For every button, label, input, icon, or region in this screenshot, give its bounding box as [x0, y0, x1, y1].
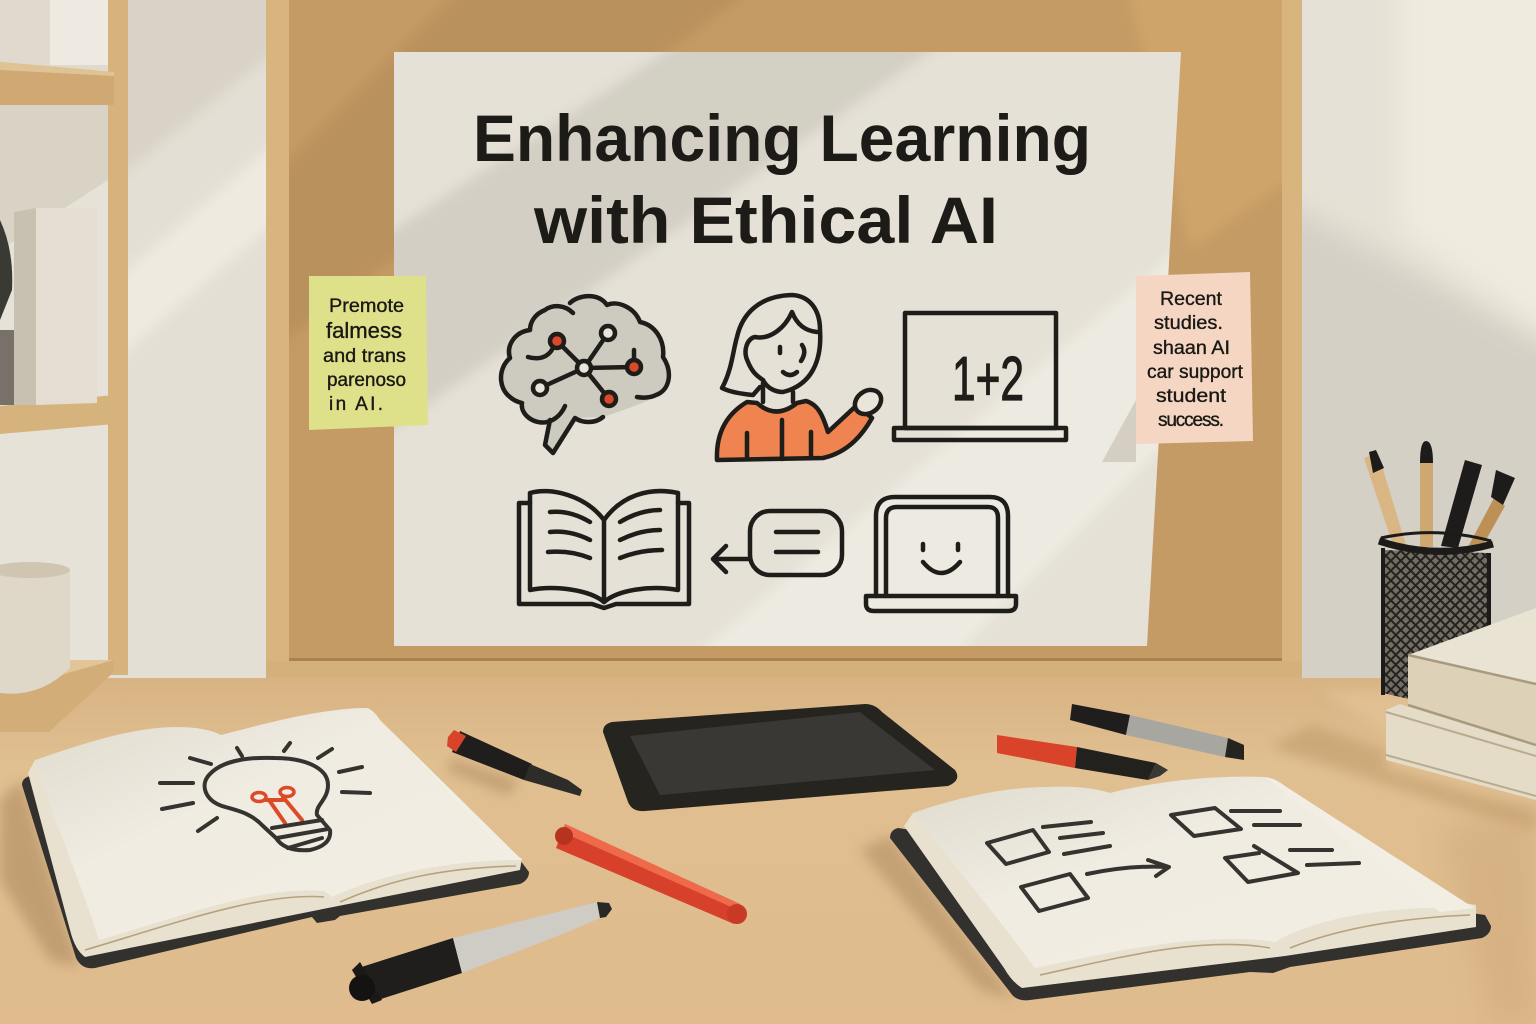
- icon: blackboard 1+2: [894, 313, 1066, 440]
- wooden shelf unit: [0, 0, 128, 675]
- sticky note: pink: Recent: [1160, 289, 1223, 310]
- title: [473, 101, 1091, 257]
- notebook: light bulb: [0, 708, 529, 968]
- lower shelf and ceramic cup: [0, 562, 114, 732]
- icon: speech bubble with arrow: [713, 511, 842, 575]
- sticky note: pink: student: [1156, 386, 1227, 407]
- poster sheet: [370, 30, 1190, 660]
- boxed book on shelf: [14, 208, 97, 405]
- icon: blackboard 1+2: 1+2: [952, 345, 1024, 414]
- pencil cup: [1364, 441, 1515, 700]
- tablet: [603, 704, 957, 811]
- icon: light bulb drawing: [160, 743, 370, 850]
- sticky note: yellow: and trans: [323, 346, 406, 367]
- title: Enhancing Learning: [473, 101, 1091, 175]
- flow diagram drawing: [987, 808, 1359, 911]
- sticky note: yellow: [309, 276, 428, 430]
- sticky note: yellow: parenoso: [327, 370, 406, 391]
- sticky note: yellow: Premote: [329, 296, 404, 317]
- sticky note: pink: shaan AI: [1153, 338, 1230, 359]
- marker: black with red cap: [446, 730, 582, 796]
- wall background: [0, 0, 1536, 690]
- marker: red and black: [997, 735, 1168, 780]
- sticky note: yellow: in AI.: [329, 394, 383, 415]
- icon: smiling laptop: [866, 497, 1016, 611]
- marker: red large: [555, 824, 747, 924]
- sticky note: pink: studies.: [1154, 313, 1223, 334]
- cork board: [260, 0, 1320, 685]
- stacked books: [1386, 608, 1536, 800]
- sticky note: pink: [1102, 272, 1253, 462]
- icon: brain network: [500, 296, 669, 453]
- sticky note: yellow: falmess: [326, 318, 402, 343]
- ceramic cup: [0, 562, 70, 694]
- icon: open book: [519, 491, 689, 608]
- icon: teacher: [717, 295, 886, 460]
- title: with Ethical AI: [533, 183, 998, 257]
- sticky note: pink: car support: [1147, 362, 1244, 383]
- marker: silver and black: [349, 902, 612, 1004]
- desk: [0, 678, 1536, 1024]
- notebook: flow diagram: [860, 777, 1491, 1000]
- sticky note: pink: success.: [1158, 410, 1224, 431]
- marker: silver grey and black: [1070, 704, 1244, 760]
